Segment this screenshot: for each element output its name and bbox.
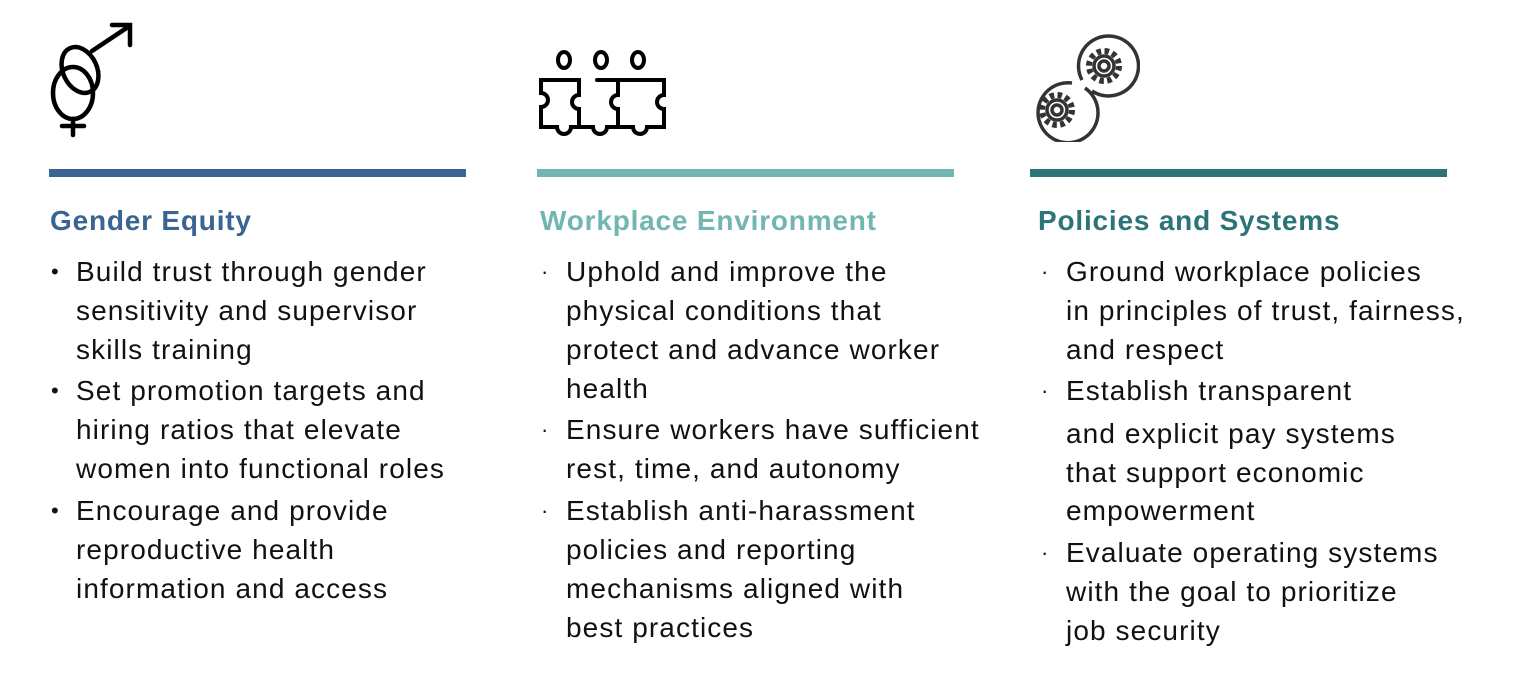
bullets: that support economic — [1066, 457, 1365, 488]
bullets: · — [1041, 259, 1048, 284]
bullets: mechanisms aligned with — [566, 573, 904, 604]
bullets: Encourage and provide — [76, 495, 389, 526]
bullets: skills training — [76, 334, 253, 365]
bar: policies — [1030, 169, 1447, 177]
panel: workplace environment — [540, 205, 980, 643]
bullets: • — [51, 378, 59, 403]
bullets: sensitivity and supervisor — [76, 295, 417, 326]
bullets: and explicit pay systems — [1066, 418, 1396, 449]
bullets: · — [1041, 378, 1048, 403]
icon: gender symbols — [50, 22, 132, 138]
bullets: Establish anti-harassment — [566, 495, 916, 526]
bullets: Evaluate operating systems — [1066, 537, 1439, 568]
icon: gears — [1036, 34, 1140, 142]
bullets: Ground workplace policies — [1066, 256, 1422, 287]
bullets: Establish transparent — [1066, 375, 1352, 406]
bullets: physical conditions that — [566, 295, 882, 326]
bullets: protect and advance worker — [566, 334, 940, 365]
bullets: rest, time, and autonomy — [566, 453, 901, 484]
panel: gender equity — [50, 205, 445, 604]
bullets: job security — [1066, 615, 1221, 646]
bar: workplace — [537, 169, 954, 177]
bullets: Build trust through gender — [76, 256, 427, 287]
bullets: health — [566, 373, 649, 404]
bar: gender equity — [49, 169, 466, 177]
bullets: • — [51, 498, 59, 523]
bullets: · — [1041, 540, 1048, 565]
icon: puzzle people — [539, 50, 666, 136]
bullets: Set promotion targets and — [76, 375, 426, 406]
bullets: hiring ratios that elevate — [76, 414, 402, 445]
bullets: · — [541, 417, 548, 442]
bullets: Uphold and improve the — [566, 256, 888, 287]
heading: Policies and Systems — [1038, 205, 1340, 236]
bullets: empowerment — [1066, 495, 1256, 526]
bullets: • — [51, 259, 59, 284]
bullets: women into functional roles — [76, 453, 445, 484]
heading: Gender Equity — [50, 205, 252, 236]
bullets: policies and reporting — [566, 534, 856, 565]
bullets: reproductive health — [76, 534, 335, 565]
bullets: in principles of trust, fairness, — [1066, 295, 1465, 326]
heading: Workplace Environment — [540, 205, 877, 236]
bullets: · — [541, 259, 548, 284]
bullets — [541, 256, 980, 643]
bullets: · — [541, 498, 548, 523]
bullets: best practices — [566, 612, 754, 643]
bullets: and respect — [1066, 334, 1224, 365]
bullets: with the goal to prioritize — [1066, 576, 1398, 607]
bullets — [1041, 256, 1465, 646]
panel: policies and systems — [1038, 205, 1465, 646]
bullets: Ensure workers have sufficient — [566, 414, 980, 445]
bullets: information and access — [76, 573, 388, 604]
bullets — [51, 256, 445, 604]
